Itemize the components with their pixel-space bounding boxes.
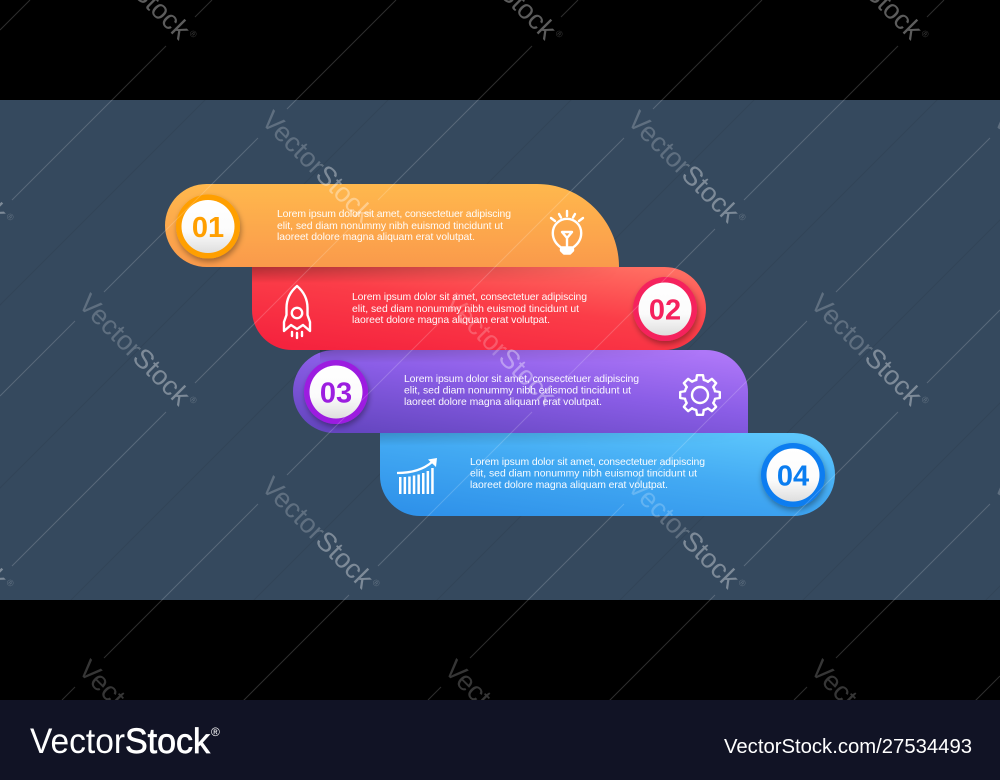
text block 3: laoreet dolore magna aliquam erat volutpat. xyxy=(404,397,602,408)
icon: light bulb xyxy=(551,211,583,254)
bar 2 top shadow xyxy=(252,267,584,281)
bar 1 shape xyxy=(165,184,619,267)
text block 1: elit, sed diam nonummy nibh euismod tincidunt ut xyxy=(277,221,503,232)
text block 4: laoreet dolore magna aliquam erat volutpat. xyxy=(470,480,668,491)
text block 4: Lorem ipsum dolor sit amet, consectetuer adipiscing xyxy=(470,457,705,468)
watermarks: VectorStock xyxy=(805,288,928,411)
footer logo: Stock: Stock xyxy=(125,722,210,761)
number badge 02 xyxy=(633,277,697,341)
text block 4: elit, sed diam nonummy nibh euismod tincidunt ut xyxy=(470,468,697,480)
watermarks: ® xyxy=(919,394,931,406)
number badge 04 xyxy=(761,443,825,507)
bar 4 shape xyxy=(380,433,835,516)
footer registered mark: ® xyxy=(211,725,220,739)
number badge 01: 01 xyxy=(192,212,224,244)
watermarks: ® xyxy=(736,211,748,223)
bar 1: orange xyxy=(165,184,619,267)
watermarks: ® xyxy=(919,28,931,40)
text block 2: laoreet dolore magna aliquam erat volutpat. xyxy=(352,315,550,326)
text block 1 xyxy=(277,209,511,243)
text block 4 xyxy=(470,457,705,491)
icon: gear xyxy=(680,375,720,415)
watermarks: ® xyxy=(4,211,16,223)
watermarks: Vector xyxy=(439,654,514,729)
footer background xyxy=(0,700,1000,780)
watermarks: ® xyxy=(736,577,748,589)
text block 3: elit, sed diam nonummy nibh euismod tincidunt ut xyxy=(404,386,631,396)
text block 3 xyxy=(404,374,639,408)
watermarks: VectorStock xyxy=(439,288,562,411)
watermarks: ® xyxy=(4,577,16,589)
text block 2: Lorem ipsum dolor sit amet, consectetuer adipiscing xyxy=(352,292,587,303)
watermarks: Vector xyxy=(805,654,880,729)
watermarks: VectorStock xyxy=(622,471,745,594)
icon: growth chart xyxy=(397,458,437,494)
bar 4 top shadow xyxy=(380,433,687,444)
footer url: VectorStock.com/27534493 xyxy=(724,735,972,758)
text block 1: Lorem ipsum dolor sit amet, consectetuer adipiscing xyxy=(277,209,511,220)
watermarks: ® xyxy=(187,394,199,406)
bar 2 shape xyxy=(252,267,706,350)
watermarks: VectorStock xyxy=(622,105,745,228)
watermarks: ® xyxy=(553,28,565,40)
footer logo: Vector: Vector xyxy=(30,722,125,761)
number badge 03: 03 xyxy=(320,378,352,410)
text block 1: laoreet dolore magna aliquam erat volutpat. xyxy=(277,232,475,243)
watermarks: Vector xyxy=(73,654,148,729)
number badge 01 xyxy=(176,194,240,258)
bar 3 top shadow xyxy=(320,350,651,361)
number badge 03 xyxy=(304,360,368,424)
text block 2 xyxy=(352,292,587,326)
number badge 02: 02 xyxy=(649,294,681,326)
text block 3: Lorem ipsum dolor sit amet, consectetuer adipiscing xyxy=(404,374,639,385)
watermarks: VectorStock xyxy=(256,105,379,228)
watermarks: ® xyxy=(370,577,382,589)
watermarks: VectorStock xyxy=(73,288,196,411)
watermarks: ® xyxy=(370,211,382,223)
bar 4: blue xyxy=(380,433,835,516)
icon: rocket xyxy=(284,286,310,338)
watermarks: VectorStock xyxy=(256,471,379,594)
slate panel xyxy=(0,100,1000,600)
watermarks: ® xyxy=(187,28,199,40)
footer bar xyxy=(0,700,1000,780)
bar 3 shape xyxy=(293,350,748,433)
watermarks: ® xyxy=(553,394,565,406)
number badge 04: 04 xyxy=(777,460,809,492)
text block 2: elit, sed diam nonummy nibh euismod tincidunt ut xyxy=(352,304,579,315)
bar 3: purple xyxy=(293,350,748,433)
bar 2: red xyxy=(252,267,706,350)
